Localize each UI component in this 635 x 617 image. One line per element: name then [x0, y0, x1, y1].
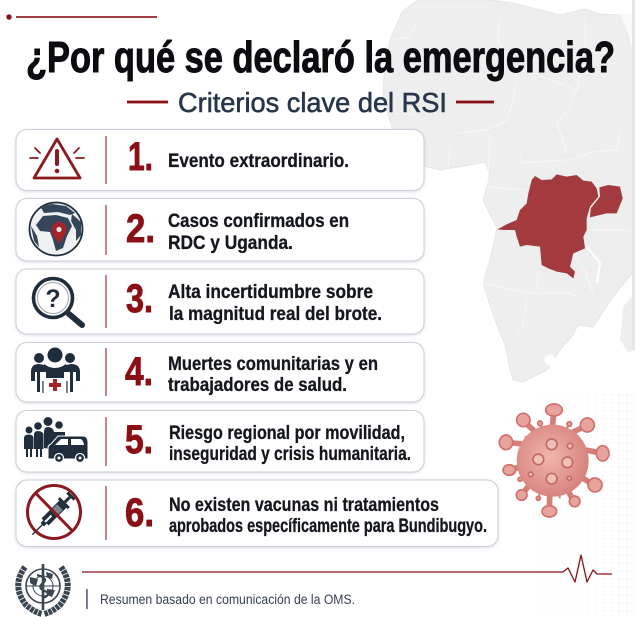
text 2: RDC y Uganda. [168, 233, 293, 254]
number 2: 2. [126, 207, 155, 251]
text 2: Casos confirmados en [168, 211, 349, 232]
subtitle: Criterios clave del RSI [178, 87, 447, 118]
number 6: 6. [125, 491, 154, 535]
panel: criterion 3 [16, 269, 424, 334]
panel: criterion 4 [16, 342, 424, 402]
text 3: Alta incertidumbre sobre [168, 282, 373, 303]
icon: warning [30, 139, 84, 178]
icon: magnifier with question mark [34, 278, 82, 325]
map of Africa [383, 0, 635, 382]
text 2 [168, 211, 349, 254]
dotted texture [522, 394, 635, 612]
text 5: Riesgo regional por movilidad, [169, 423, 405, 444]
icon: globe with pin [30, 202, 82, 256]
text 6: No existen vacunas ni tratamientos [169, 495, 439, 516]
icon: WHO emblem [18, 564, 68, 614]
text 3: la magnitud real del brote. [169, 304, 382, 325]
footer line with heartbeat [82, 555, 612, 582]
panel: criterion 1 [16, 130, 424, 190]
number 4: 4. [125, 350, 153, 394]
text 6 [169, 495, 487, 537]
top accent line [6, 14, 157, 20]
panel: criterion 5 [16, 410, 424, 472]
panel: criterion 6 [16, 480, 498, 546]
text 5: inseguridad y crisis humanitaria. [169, 444, 411, 465]
text 1: Evento extraordinario. [168, 151, 349, 172]
icon: crossed-out syringe [27, 486, 80, 540]
text 6: aprobados específicamente para Bundibugyo. [169, 516, 487, 537]
number 1: 1. [128, 135, 153, 179]
icon: people and van [24, 417, 88, 462]
panel: criterion 2 [16, 198, 424, 261]
icon: virus [499, 404, 609, 517]
text 5 [169, 423, 411, 465]
footer note: Resumen basado en comunicación de la OMS. [100, 592, 355, 607]
icon: magnifier with question mark: ? [45, 285, 61, 313]
text 4: trabajadores de salud. [168, 375, 347, 396]
icon: health workers [31, 348, 80, 393]
text 4: Muertes comunitarias y en [168, 354, 378, 375]
number 5: 5. [125, 418, 153, 462]
text 3 [168, 282, 382, 325]
DRC and Uganda highlighted [497, 174, 623, 278]
text 4 [168, 354, 378, 396]
number 3: 3. [126, 277, 153, 321]
